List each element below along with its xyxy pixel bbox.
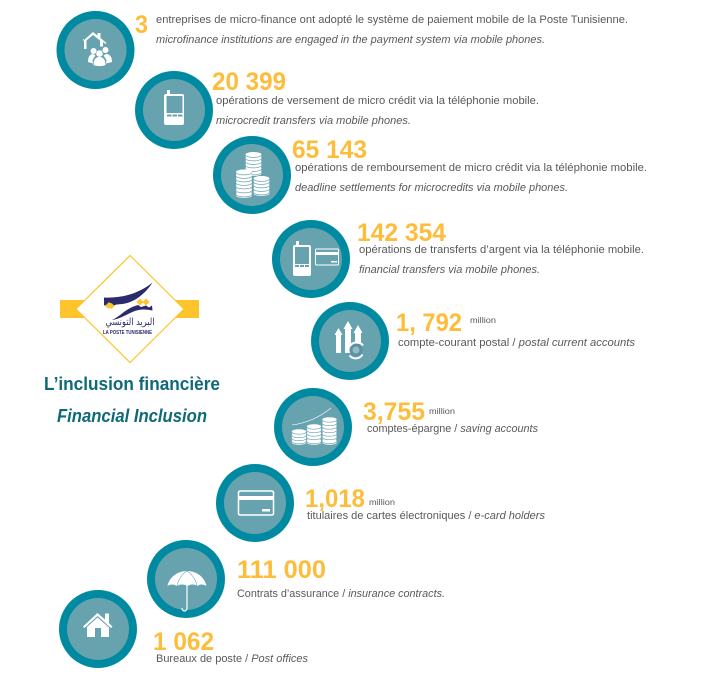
description: Bureaux de poste / Post offices <box>156 653 308 665</box>
value: 65 143: 65 143 <box>292 136 367 164</box>
value: 111 000: 111 000 <box>237 556 326 584</box>
value: 20 399: 20 399 <box>212 68 286 96</box>
English description: microfinance institutions are engaged in the payment system via mobile phones. <box>156 34 545 46</box>
French description: entreprises de micro-finance ont adopté le système de paiement mobile de la Poste Tunisienne. <box>156 14 628 26</box>
item 5: postal current accounts <box>311 302 636 380</box>
item 9: post offices <box>59 590 308 668</box>
logo: La Poste Tunisienne emblem <box>60 256 199 362</box>
icon: umbrella <box>147 540 225 618</box>
description: comptes-épargne / saving accounts <box>367 423 538 435</box>
unit: million: million <box>369 498 395 507</box>
item 6: saving accounts <box>274 388 538 466</box>
item 1: microfinance institutions <box>56 11 628 89</box>
English description: microcredit transfers via mobile phones. <box>216 115 411 127</box>
unit: million: million <box>429 407 455 416</box>
value: 3: 3 <box>135 11 148 39</box>
logo: La Poste Tunisienne emblem: LA POSTE TUNISIENNE <box>103 330 153 336</box>
value: 3,755: 3,755 <box>363 398 425 426</box>
item 2: microcredit transfers <box>135 68 539 149</box>
English description: deadline settlements for microcredits via mobile phones. <box>295 182 568 194</box>
French description: opérations de remboursement de micro crédit via la téléphonie mobile. <box>295 162 647 174</box>
icon: house and people <box>56 11 134 89</box>
title: English: Financial Inclusion <box>57 406 207 426</box>
value: 1, 792: 1, 792 <box>396 309 462 337</box>
title: French: L’inclusion financière <box>44 374 220 394</box>
icon: mobile phone <box>135 71 213 149</box>
icon: bank card <box>216 464 294 542</box>
item 4: financial transfers <box>272 219 644 298</box>
value: 142 354: 142 354 <box>357 219 446 247</box>
item 8: insurance contracts <box>147 540 445 618</box>
value: 1,018: 1,018 <box>305 485 365 513</box>
item 3: deadline settlements <box>213 136 647 214</box>
description: compte-courant postal / postal current accounts <box>398 337 636 349</box>
French description: opérations de versement de micro crédit via la téléphonie mobile. <box>216 95 539 107</box>
icon: rising arrows and recycling globe <box>311 302 389 380</box>
item 7: e-card holders <box>216 464 545 542</box>
icon: growing coin stacks <box>274 388 352 466</box>
unit: million: million <box>470 316 496 325</box>
description: titulaires de cartes électroniques / e-card holders <box>307 510 545 522</box>
value: 1 062: 1 062 <box>153 628 214 656</box>
French description: opérations de transferts d’argent via la téléphonie mobile. <box>359 244 644 256</box>
logo: La Poste Tunisienne emblem: البريد التونسي <box>106 317 154 328</box>
icon: coin stacks <box>213 136 291 214</box>
icon: phone and card <box>272 220 350 298</box>
icon: house <box>59 590 137 668</box>
English description: financial transfers via mobile phones. <box>359 264 540 276</box>
description: Contrats d’assurance / insurance contracts. <box>237 588 445 600</box>
